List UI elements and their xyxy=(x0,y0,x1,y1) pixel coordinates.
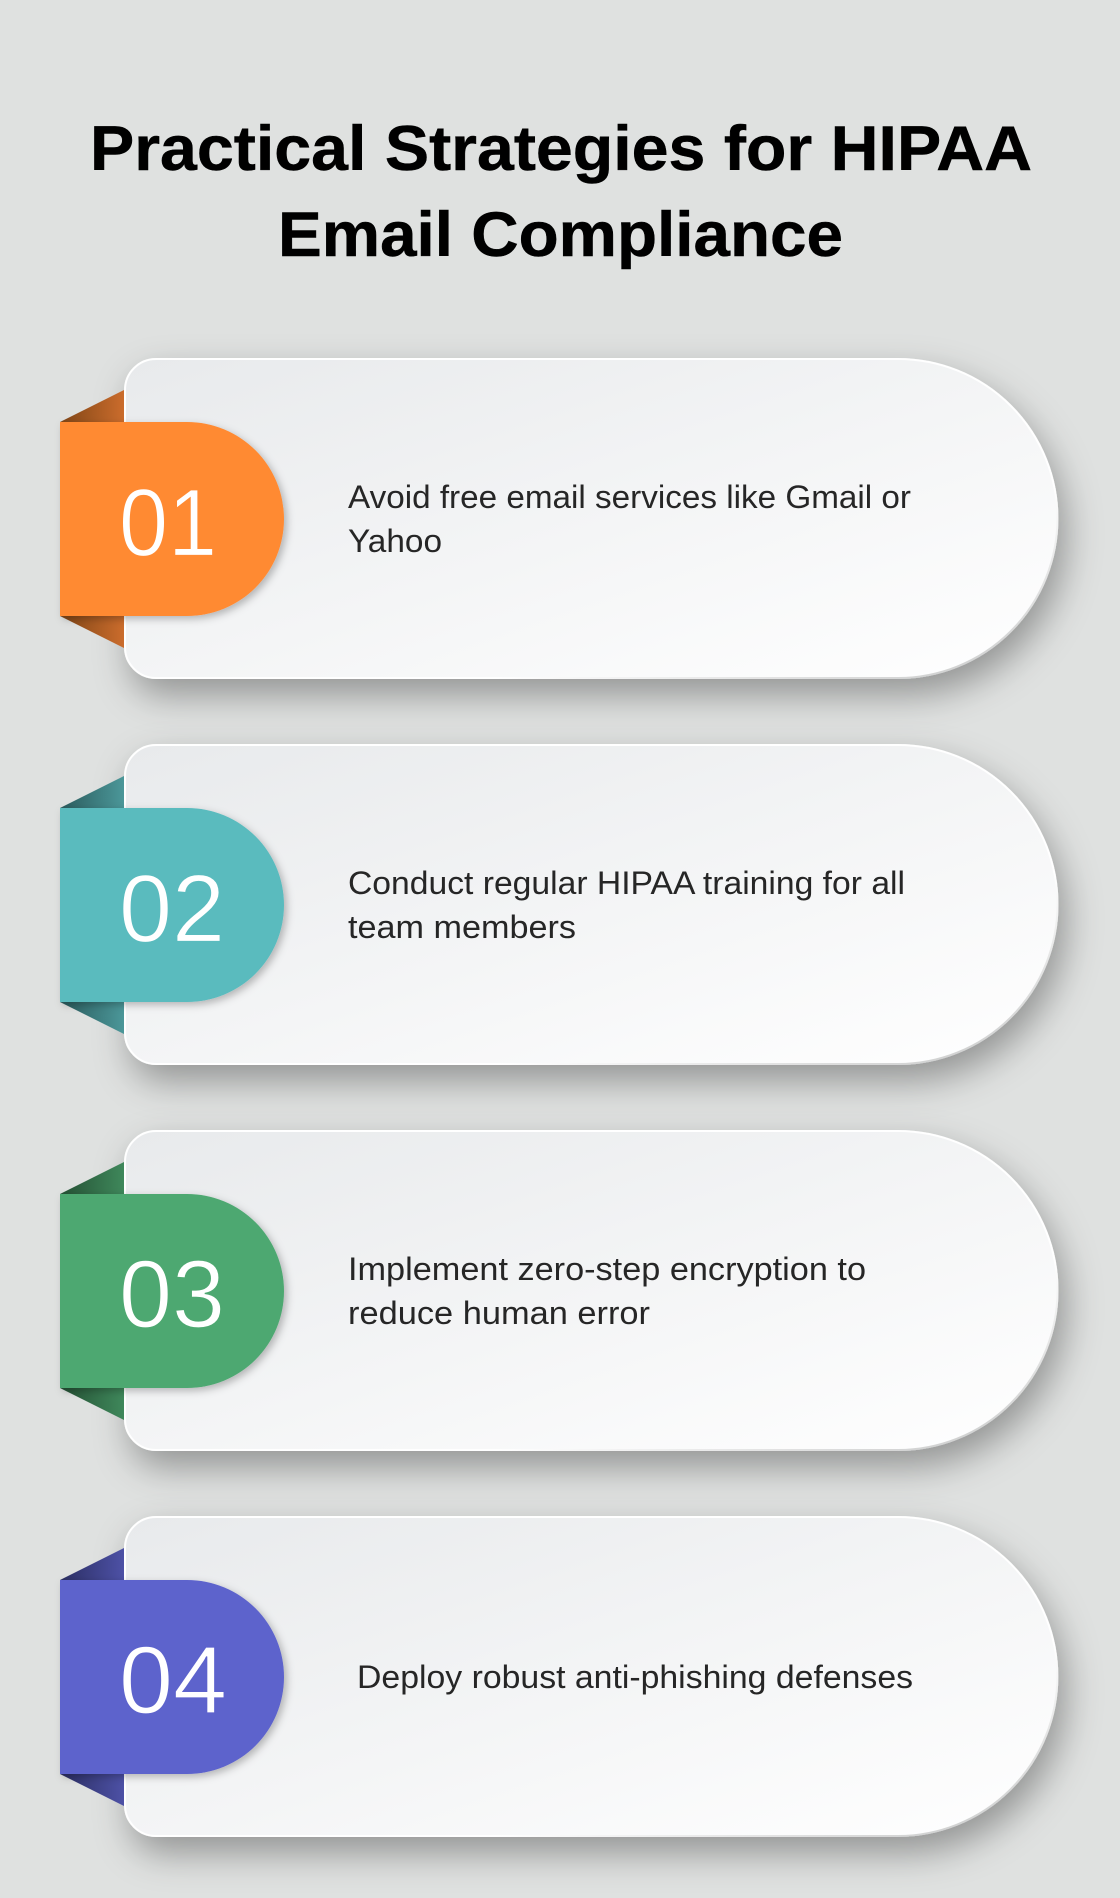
ribbon fold top 04 xyxy=(60,1548,124,1580)
number 04: 04 xyxy=(119,1627,227,1734)
card background 02 xyxy=(125,745,1058,1064)
text 02: team members xyxy=(348,909,576,945)
ribbon fold bottom 01 xyxy=(60,616,124,648)
ribbon fold bottom 02 xyxy=(60,1002,124,1034)
text 01 xyxy=(348,479,911,559)
ribbon fold bottom 03 xyxy=(60,1388,124,1420)
number badge 02 xyxy=(60,808,284,1002)
text 03 xyxy=(348,1251,866,1331)
panel: strategy 02 xyxy=(60,745,1058,1064)
ribbon fold top 01 xyxy=(60,390,124,422)
number badge 01 xyxy=(60,422,284,616)
card background 01 xyxy=(125,359,1057,678)
title: Email Compliance xyxy=(278,200,843,270)
number 02: 02 xyxy=(119,856,225,962)
number badge 03 xyxy=(60,1194,284,1388)
card background 03 xyxy=(125,1131,1058,1450)
title xyxy=(90,114,1032,270)
ribbon fold bottom 04 xyxy=(60,1774,124,1806)
ribbon fold top 03 xyxy=(60,1162,124,1194)
number 03: 03 xyxy=(119,1241,225,1348)
text 04: Deploy robust anti-phishing defenses xyxy=(357,1659,913,1695)
panel: strategy 04 xyxy=(60,1517,1057,1836)
ribbon fold top 02 xyxy=(60,776,124,808)
panel: strategy 03 xyxy=(60,1131,1058,1450)
text 01: Yahoo xyxy=(348,523,442,559)
title: Practical Strategies for HIPAA xyxy=(90,114,1032,184)
text 02 xyxy=(348,865,905,945)
text 02: Conduct regular HIPAA training for all xyxy=(348,865,905,901)
text 03: Implement zero-step encryption to xyxy=(348,1251,866,1287)
text 03: reduce human error xyxy=(348,1295,650,1331)
text 01: Avoid free email services like Gmail or xyxy=(348,479,911,515)
panel: strategy 01 xyxy=(60,359,1057,678)
card background 04 xyxy=(125,1517,1057,1836)
number 01: 01 xyxy=(119,470,217,576)
number badge 04 xyxy=(60,1580,284,1774)
